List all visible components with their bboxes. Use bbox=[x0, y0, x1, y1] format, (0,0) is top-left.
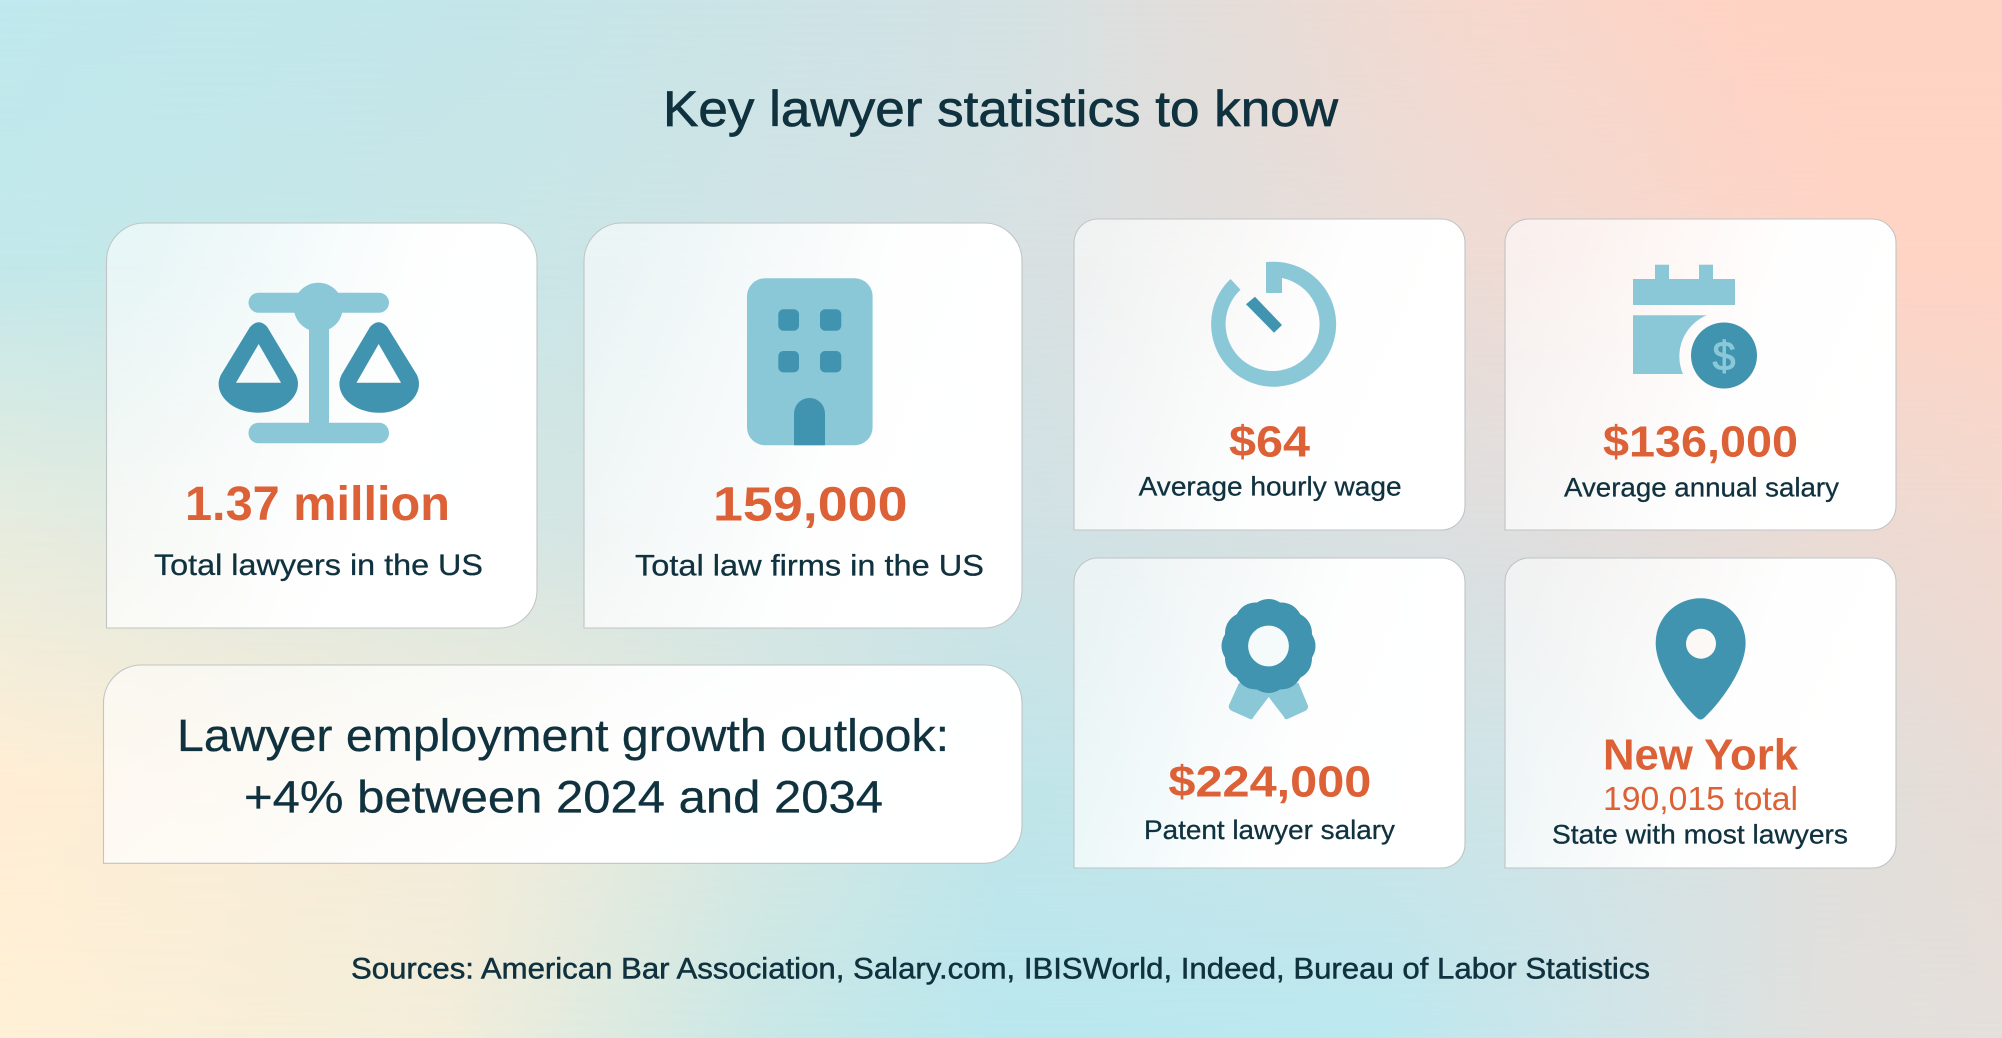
stat value: $64 bbox=[1229, 418, 1311, 467]
sources: Sources: American Bar Association, Salary.com, IBISWorld, Indeed, Bureau of Labor Statistics bbox=[351, 952, 1650, 986]
stat value: New York bbox=[1603, 731, 1799, 780]
stat label: Average hourly wage bbox=[1139, 472, 1402, 502]
icon: calendar with dollar coin bbox=[1633, 265, 1757, 388]
icon: scales of justice bbox=[219, 283, 419, 443]
stat label: Patent lawyer salary bbox=[1144, 815, 1396, 845]
stat value: 1.37 million bbox=[185, 478, 450, 531]
stat label: Total lawyers in the US bbox=[154, 549, 483, 582]
stat value: $224,000 bbox=[1168, 758, 1371, 807]
stat label: Average annual salary bbox=[1564, 472, 1840, 502]
icon: calendar with dollar coin: $ bbox=[1713, 333, 1736, 379]
panel: patent lawyer salary bbox=[1074, 558, 1465, 868]
panel: hourly wage bbox=[1074, 219, 1465, 530]
icon: map pin bbox=[1656, 598, 1746, 720]
title: Key lawyer statistics to know bbox=[663, 81, 1339, 137]
panel: total lawyers bbox=[106, 223, 537, 628]
stat sub-value: 190,015 total bbox=[1603, 780, 1798, 817]
icon: award ribbon bbox=[1222, 599, 1316, 719]
panel: state with most lawyers bbox=[1505, 558, 1896, 868]
icon: stopwatch bbox=[1211, 262, 1336, 387]
stat value: $136,000 bbox=[1603, 418, 1798, 467]
outlook text line one: Lawyer employment growth outlook: bbox=[177, 710, 949, 761]
panel: employment growth outlook bbox=[104, 665, 1022, 863]
icon: office building bbox=[747, 278, 873, 445]
panel: total law firms bbox=[584, 223, 1022, 628]
stat value: 159,000 bbox=[713, 479, 908, 532]
panel: annual salary bbox=[1505, 219, 1896, 530]
outlook text line two: +4% between 2024 and 2034 bbox=[244, 772, 883, 823]
stat label: Total law firms in the US bbox=[635, 550, 984, 583]
stat label: State with most lawyers bbox=[1552, 819, 1848, 849]
